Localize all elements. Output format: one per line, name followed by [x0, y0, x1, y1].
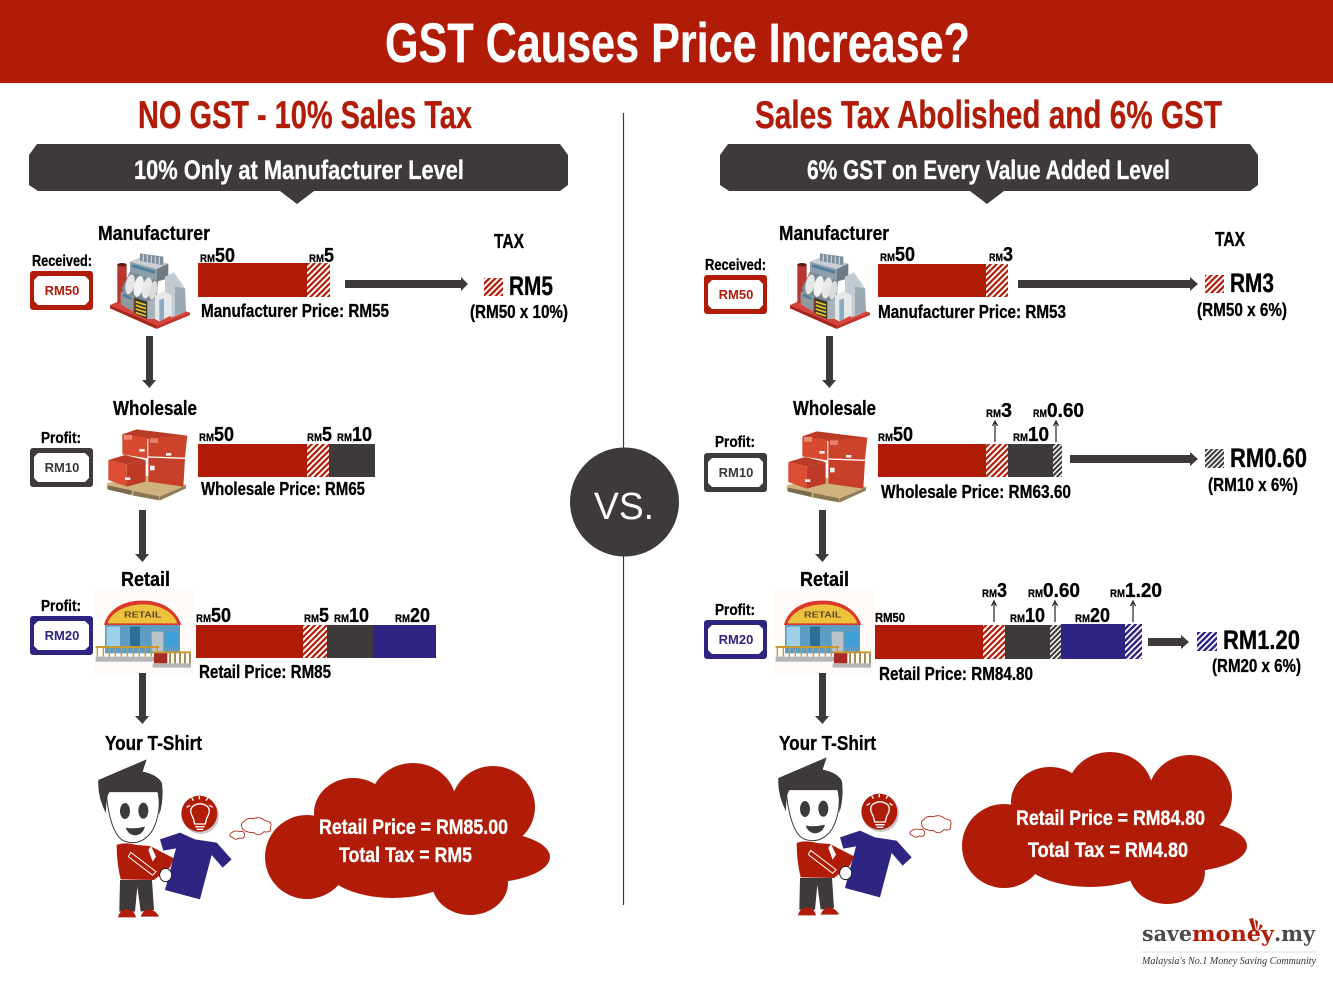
row: t-shirt: Your T-Shirt: [779, 733, 876, 755]
row: t-shirt: [778, 733, 1247, 915]
tax result: TAX: [1215, 229, 1246, 251]
tax result: RM3: [1230, 268, 1274, 298]
price bar: 50: [214, 424, 234, 446]
vs badge: [570, 448, 679, 556]
price bar: RM: [309, 253, 324, 265]
cloud: totals: Total Tax = RM5: [339, 844, 472, 867]
price bar: RM50: [875, 610, 905, 625]
price bar: RM: [1013, 432, 1028, 444]
tax result: (RM20 x 6%): [1212, 656, 1301, 676]
logo: savemoney.my: money: [1192, 921, 1275, 946]
row: wholesale: Profit:: [41, 430, 81, 447]
row: wholesale: Wholesale Price: RM65: [201, 479, 365, 499]
price bar: 10: [352, 424, 372, 446]
price bar: RM: [1028, 588, 1043, 600]
row: manufacturer: Manufacturer Price: RM55: [201, 301, 389, 321]
price bar: 3: [1001, 400, 1012, 422]
cloud: totals: Retail Price = RM84.80: [1016, 807, 1205, 830]
price bar: RM: [1033, 408, 1047, 420]
tax result: (RM50 x 10%): [470, 302, 568, 322]
banner: manufacturer level: [29, 144, 568, 204]
price bar: 3: [1003, 244, 1013, 266]
price bar: 5: [322, 424, 332, 446]
price bar: RM: [334, 613, 349, 625]
icon: boxes: [107, 429, 187, 500]
price bar: 5: [319, 605, 329, 627]
panel: with GST: [704, 94, 1307, 915]
received box: RM50: [45, 283, 79, 298]
row: retail: Profit:: [41, 598, 81, 615]
tax result: [470, 231, 568, 322]
tax result: [1197, 625, 1301, 676]
price bar: [878, 244, 1013, 297]
price bar: 10: [1028, 424, 1049, 446]
price bar: 20: [1090, 605, 1110, 627]
arrow to tax: [1018, 277, 1198, 291]
tax result: RM0.60: [1230, 443, 1307, 473]
row: wholesale: Wholesale: [113, 398, 197, 420]
price bar: 0.60: [1047, 400, 1084, 422]
logo: savemoney.my: .my: [1274, 921, 1316, 946]
tax result: TAX: [494, 231, 525, 253]
profit box: RM10: [45, 460, 79, 475]
price bar: RM: [1110, 588, 1125, 600]
arrow down: [135, 510, 149, 562]
row: retail: [30, 569, 436, 682]
price bar: 3: [997, 580, 1007, 602]
logo: savemoney.my: save: [1142, 921, 1192, 946]
price bar: RM: [1075, 613, 1090, 625]
price bar: RM: [304, 613, 319, 625]
price bar: RM: [880, 252, 895, 264]
received box: [30, 271, 93, 310]
row: retail: Profit:: [715, 602, 755, 619]
price bar: [196, 605, 436, 658]
price bar: 0.60: [1043, 580, 1080, 602]
price bar: [198, 424, 375, 477]
arrow down: [815, 673, 829, 724]
centre divider: [622, 113, 624, 905]
tax result: RM1.20: [1223, 625, 1300, 655]
row: retail: Retail: [121, 569, 170, 591]
banner: every level: [720, 144, 1258, 204]
price bar: RM: [199, 432, 214, 444]
title: GST Causes Price Increase?: [385, 11, 970, 74]
row: wholesale: [704, 398, 1307, 502]
tax result: [1205, 443, 1307, 495]
tax result: (RM10 x 6%): [1208, 475, 1298, 495]
row: manufacturer: Manufacturer Price: RM53: [878, 302, 1066, 322]
received box: RM50: [719, 287, 753, 302]
price bar: 20: [410, 605, 430, 627]
price bar: RM: [1010, 613, 1025, 625]
icon: man with t-shirt: [778, 757, 951, 915]
price bar: RM: [982, 588, 997, 600]
price bar: 50: [211, 605, 231, 627]
row: manufacturer: [704, 223, 1287, 329]
cloud: totals: [962, 752, 1247, 904]
profit box: [704, 453, 767, 492]
title banner: [0, 0, 1333, 83]
price bar: 1.20: [1125, 580, 1162, 602]
logo: savemoney.my: [1141, 918, 1317, 967]
price bar: [198, 245, 334, 297]
arrow down: [815, 510, 829, 562]
profit box: RM20: [45, 628, 79, 643]
icon: man with t-shirt: [98, 759, 271, 917]
tax result: RM5: [509, 271, 553, 301]
price bar: 50: [895, 244, 915, 266]
row: wholesale: Wholesale: [793, 398, 876, 420]
price bar: 10: [1025, 605, 1045, 627]
icon: retail store: [774, 588, 873, 675]
banner: every level: 6% GST on Every Value Added Level: [807, 155, 1170, 185]
row: manufacturer: Received:: [32, 253, 92, 270]
row: wholesale: Profit:: [715, 434, 755, 451]
arrow down: [822, 336, 836, 388]
banner: manufacturer level: 10% Only at Manufacturer Level: [134, 155, 464, 185]
icon: boxes: [787, 431, 867, 502]
icon: factory: [110, 253, 190, 329]
received box: [704, 275, 767, 314]
profit box: RM20: [719, 632, 753, 647]
tax result: (RM50 x 6%): [1197, 300, 1287, 320]
row: manufacturer: [30, 223, 568, 329]
row: manufacturer: Manufacturer: [779, 223, 889, 245]
tax result: [1197, 229, 1287, 320]
price bar: 10: [349, 605, 369, 627]
row: retail: Retail: [800, 569, 849, 591]
icon: retail store: [94, 588, 193, 675]
price bar: 50: [893, 424, 913, 446]
price bar: RM: [989, 252, 1003, 264]
row: retail: Retail Price: RM85: [199, 662, 331, 682]
row: retail: [704, 569, 1301, 684]
row: wholesale: [30, 398, 375, 500]
price bar: [878, 400, 1084, 477]
row: retail: Retail Price: RM84.80: [879, 664, 1033, 684]
price bar: RM: [200, 253, 215, 265]
arrow down: [142, 336, 156, 388]
profit box: [30, 448, 93, 487]
price bar: RM: [878, 432, 893, 444]
panel: no GST: [29, 94, 568, 917]
vs badge: VS.: [594, 486, 654, 528]
price bar: 50: [215, 245, 235, 267]
arrow to tax: [1070, 452, 1198, 466]
price bar: RM: [986, 408, 1001, 420]
price bar: RM: [307, 432, 322, 444]
cloud: totals: [265, 763, 550, 915]
profit box: [704, 620, 767, 659]
profit box: [30, 616, 93, 655]
cloud: totals: Retail Price = RM85.00: [319, 816, 508, 839]
logo: savemoney.my: Malaysia's No.1 Money Saving Community: [1141, 956, 1317, 967]
price bar: RM: [395, 613, 410, 625]
price bar: RM: [337, 432, 352, 444]
row: wholesale: Wholesale Price: RM63.60: [881, 482, 1071, 502]
arrow down: [135, 673, 149, 724]
profit box: RM10: [719, 465, 753, 480]
icon: factory: [790, 253, 870, 329]
heading: no GST: NO GST - 10% Sales Tax: [138, 94, 472, 137]
arrow to tax: [345, 277, 468, 291]
price bar: RM: [196, 613, 211, 625]
row: t-shirt: [98, 733, 550, 917]
row: t-shirt: Your T-Shirt: [105, 733, 202, 755]
price bar: [875, 580, 1162, 659]
cloud: totals: Total Tax = RM4.80: [1028, 839, 1188, 862]
row: manufacturer: Manufacturer: [98, 223, 210, 245]
row: manufacturer: Received:: [705, 257, 766, 274]
arrow to tax: [1148, 635, 1189, 649]
price bar: 5: [324, 245, 334, 267]
